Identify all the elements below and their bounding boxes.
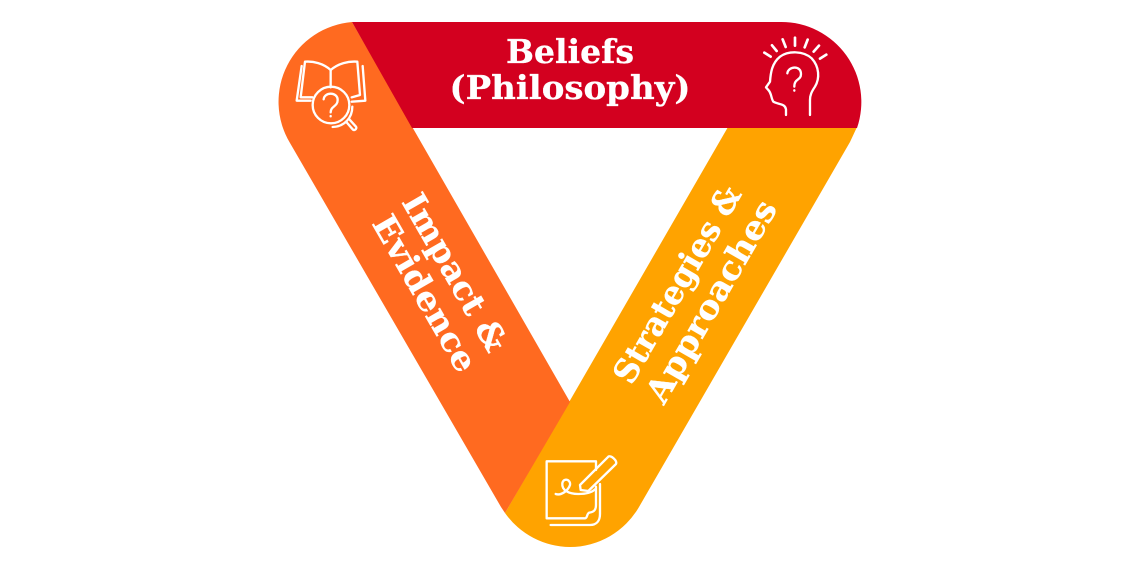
icon: head with question mark (764, 38, 826, 115)
heading: beliefs (philosophy) (450, 32, 690, 107)
heading: impact and evidence (364, 186, 516, 379)
heading: impact and evidence: Evidence (364, 208, 486, 379)
panel: impact and evidence band (279, 22, 570, 513)
heading: beliefs (philosophy): Beliefs (506, 32, 634, 71)
icon: book with magnifying glass (297, 62, 365, 130)
heading: strategies and approaches: Approaches (637, 193, 785, 411)
heading: impact and evidence: Impact & (394, 186, 516, 358)
heading: beliefs (philosophy): (Philosophy) (450, 68, 690, 107)
panel: beliefs band (352, 22, 861, 128)
heading: strategies and approaches: Strategies & (605, 178, 750, 390)
panel: strategies and approaches band (505, 127, 857, 547)
icon: notepad and pencil (547, 456, 616, 525)
